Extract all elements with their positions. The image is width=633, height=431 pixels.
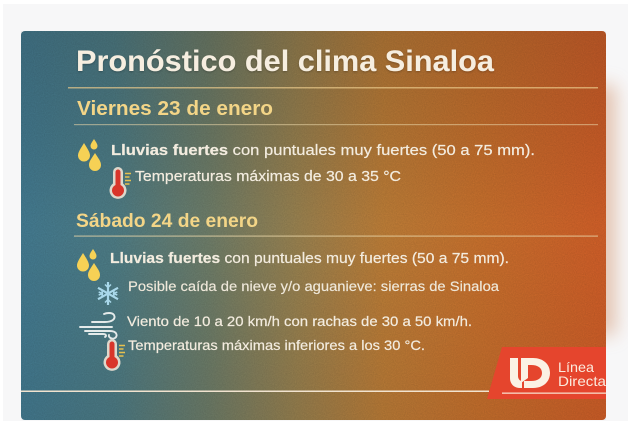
heading: Friday: Viernes 23 de enero (77, 98, 273, 120)
text: rain Friday: Lluvias fuertes con puntuales muy fuertes (50 a 75 mm). (111, 142, 535, 159)
icon: thermometer Saturday (104, 339, 125, 371)
icon: snowflake (98, 282, 118, 305)
divider under title (68, 87, 598, 88)
icon: rain drops Saturday (77, 249, 100, 281)
text: temperature Friday: Temperaturas máximas de 30 a 35 °C (135, 169, 401, 185)
heading: Saturday: Sábado 24 de enero (76, 210, 258, 232)
icon: rain drops Friday (78, 139, 101, 171)
text: snow: Posible caída de nieve y/o aguanieve: sierras de Sinaloa (128, 279, 500, 294)
divider under Saturday heading (74, 236, 598, 237)
logo: Línea Directa (487, 347, 606, 399)
text: rain Saturday: Lluvias fuertes con puntuales muy fuertes (50 a 75 mm). (110, 251, 509, 267)
icon: wind (80, 313, 117, 339)
divider under Friday heading (74, 124, 598, 125)
bottom rule (21, 390, 489, 392)
icon: thermometer Friday (110, 167, 131, 199)
text: wind: Viento de 10 a 20 km/h con rachas de 30 a 50 km/h. (127, 314, 472, 329)
text: temperature Saturday: Temperaturas máximas inferiores a los 30 °C. (128, 337, 425, 353)
title: Pronóstico del clima Sinaloa (76, 45, 494, 78)
logo: Línea Directa: Directa (558, 373, 606, 389)
logo: Línea Directa: Línea (558, 359, 594, 375)
page background (606, 65, 628, 355)
